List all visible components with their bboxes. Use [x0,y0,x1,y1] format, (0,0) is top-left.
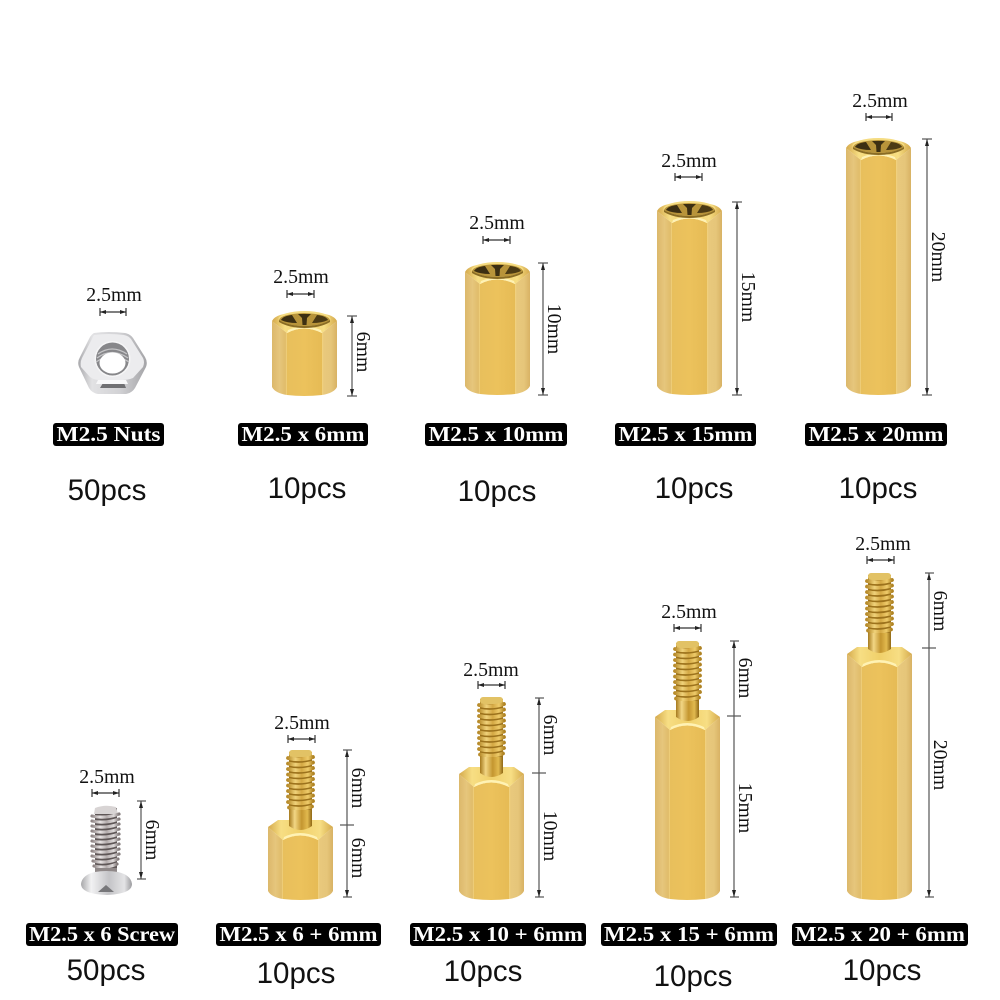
height dimension: 15mm: 15mm [737,272,759,323]
icon: brass standoff 20mm [846,138,911,395]
item: M2.5 x 6mm standoff [238,266,374,505]
icon: male-female standoff 15+6mm [655,641,720,900]
label: M2.5 Nuts: M2.5 Nuts [56,422,160,446]
height dimension: 6mm: 6mm [141,820,163,861]
item: M2.5 x 10mm standoff [425,212,567,508]
item: M2.5 x 20 + 6mm standoff [792,533,968,987]
height dimension: 6mm + 6mm: 6mm [347,838,369,879]
label: M2.5 x 15mm: M2.5 x 15mm [618,422,753,446]
height dimension: 6mm + 15mm: 15mm [734,783,756,834]
item: M2.5 nut [53,284,164,507]
height dimension: 6mm + 15mm: 6mm [734,658,756,699]
label: M2.5 x 10mm: M2.5 x 10mm [428,422,564,446]
label: M2.5 x 6 + 6mm: M2.5 x 6 + 6mm [220,922,378,946]
label: M2.5 x 10 + 6mm: M2.5 x 10 + 6mm [413,922,584,946]
quantity: 10pcs: 10pcs [268,472,346,505]
width dimension: 2.5mm [86,284,142,306]
label: M2.5 x 20 + 6mm: M2.5 x 20 + 6mm [795,922,966,946]
quantity: 50pcs: 50pcs [67,954,145,987]
quantity: 10pcs: 10pcs [458,475,536,508]
icon: hex nut [78,332,147,394]
label: M2.5 x 20mm: M2.5 x 20mm [808,422,944,446]
item: M2.5 x 15 + 6mm standoff [601,601,777,993]
height dimension: 6mm + 6mm: 6mm [347,768,369,809]
height dimension: 6mm + 20mm: 20mm [929,740,951,791]
height dimension: 6mm: 6mm [352,332,374,373]
icon: male-female standoff 20+6mm [847,573,912,900]
height dimension: 15mm [732,202,759,395]
icon: brass standoff 15mm [657,201,722,395]
quantity: 10pcs: 10pcs [655,472,733,505]
quantity: 10pcs: 10pcs [839,472,917,505]
height dimension: 10mm: 10mm [543,304,565,355]
height dimension: 10mm [538,263,565,395]
height dimension: 20mm [922,139,949,395]
label: M2.5 x 6 Screw: M2.5 x 6 Screw [29,922,176,946]
width dimension: 2.5mm [463,659,519,681]
width dimension: 2.5mm [661,601,717,623]
height dimension: 6mm + 10mm: 6mm [539,715,561,756]
icon: male-female standoff 10+6mm [459,697,524,900]
item: M2.5 x 6 screw [26,766,178,987]
icon: brass standoff 10mm [465,262,530,395]
width dimension [86,284,142,316]
item: M2.5 x 15mm standoff [615,150,759,505]
height dimension: 6mm + 10mm: 10mm [539,811,561,862]
width dimension: 2.5mm [661,150,717,172]
height dimension: 20mm: 20mm [927,232,949,283]
quantity: 10pcs: 10pcs [257,957,335,990]
icon: male-female standoff 6+6mm [268,750,333,900]
height dimension: 6mm [347,316,374,396]
item: M2.5 x 6 + 6mm standoff [216,712,381,990]
width dimension: 2.5mm [855,533,911,555]
height dimension: 6mm + 15mm [727,641,756,897]
quantity: 10pcs: 10pcs [843,954,921,987]
item: M2.5 x 10 + 6mm standoff [410,659,586,988]
label: M2.5 x 15 + 6mm: M2.5 x 15 + 6mm [604,922,775,946]
width dimension: 2.5mm [79,766,135,788]
icon: brass standoff 6mm [272,311,337,396]
item: M2.5 x 20mm standoff [805,90,949,505]
height dimension: 6mm + 20mm: 6mm [929,591,951,632]
height dimension: 6mm + 10mm [532,698,561,897]
quantity: 10pcs: 10pcs [444,955,522,988]
height dimension: 6mm + 20mm [922,573,951,897]
label: M2.5 x 6mm: M2.5 x 6mm [242,422,365,446]
width dimension: 2.5mm [852,90,908,112]
quantity: 10pcs: 10pcs [654,960,732,993]
width dimension: 2.5mm [274,712,330,734]
width dimension: 2.5mm [469,212,525,234]
quantity: 50pcs: 50pcs [68,474,146,507]
height dimension: 6mm + 6mm [340,750,369,897]
icon: silver screw [81,806,132,895]
width dimension [273,266,329,298]
width dimension: 2.5mm [273,266,329,288]
width dimension [469,212,525,244]
height dimension: 6mm [137,801,163,879]
